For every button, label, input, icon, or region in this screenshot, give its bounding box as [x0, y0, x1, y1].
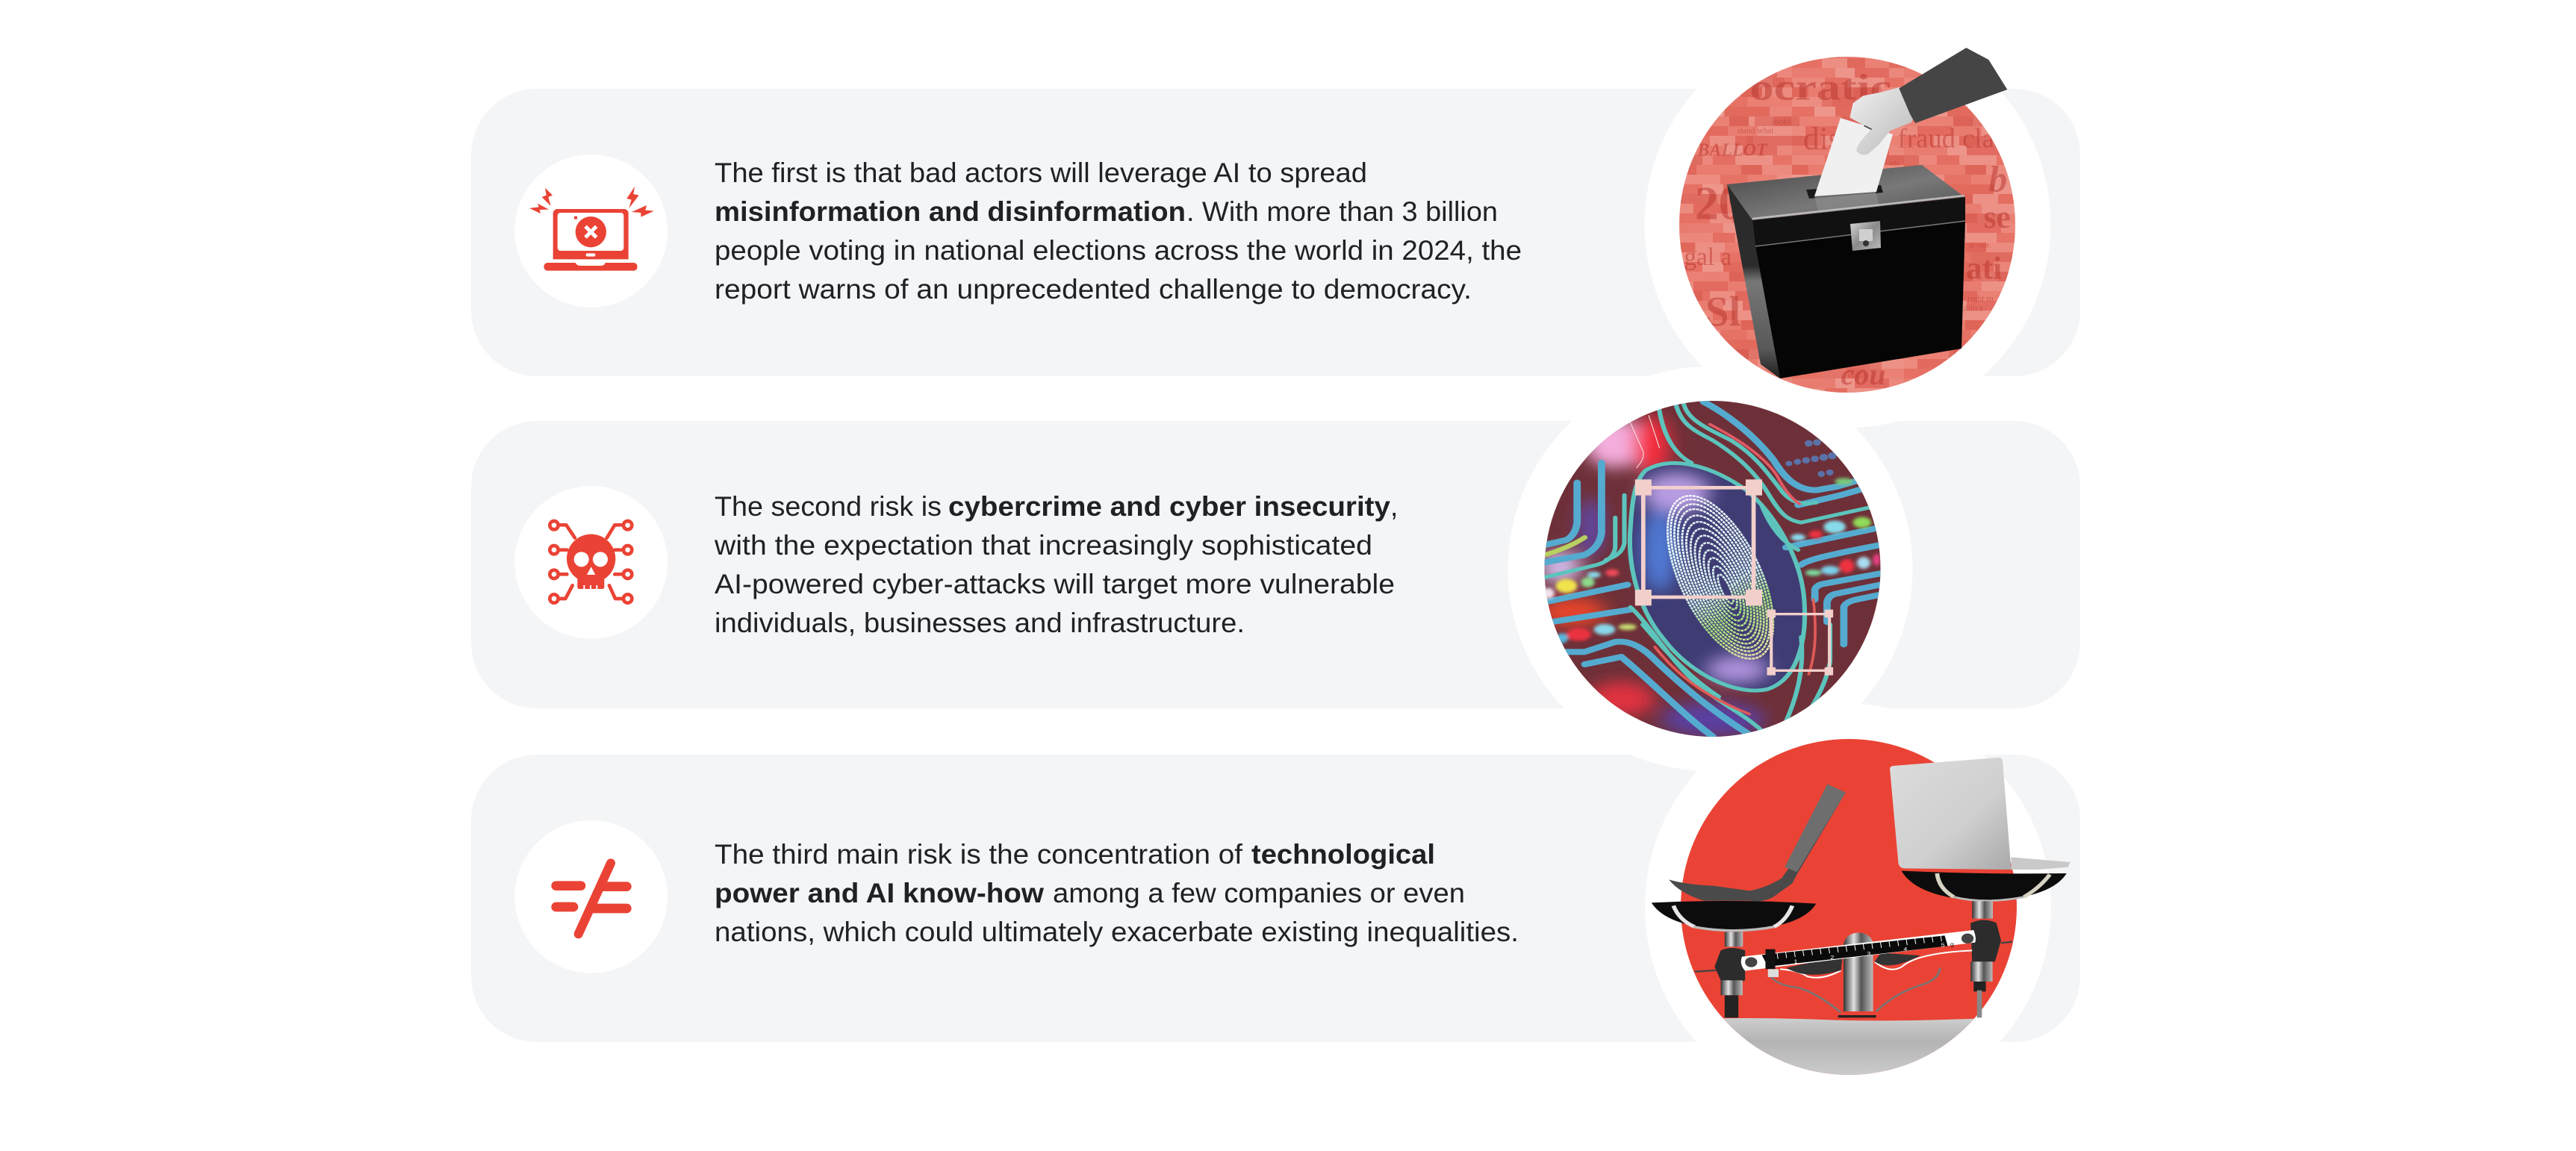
old tool: [1669, 785, 1846, 902]
fingerprint: [1646, 485, 1795, 670]
text: second risk: with the expectation that increasingly sophisticated: [714, 530, 1372, 561]
collage background: 20: [1695, 177, 1742, 229]
circuit traces: [1545, 402, 1880, 737]
text: first risk: misinformation and disinformation: [715, 196, 1186, 227]
central oval: [1630, 463, 1805, 690]
collage background: BALLOT: [1696, 140, 1768, 160]
scale posts: [1695, 901, 2012, 1017]
icon: not equal: [514, 820, 668, 973]
red disc and grey base: [1673, 735, 2023, 1079]
ruler beam: 5: [1941, 942, 1945, 948]
collage background: stand what: [1737, 126, 1774, 135]
text: third risk: technological: [1251, 839, 1435, 870]
text: second risk: cybercrime and cyber insecurity: [948, 491, 1390, 522]
ruler beam: 4: [1903, 946, 1908, 952]
collage background: right m: [1967, 293, 1994, 303]
text: third risk: among a few companies or even: [1053, 878, 1465, 908]
collage background: ar vote.: [1969, 242, 1991, 250]
ballot box: [1727, 165, 1965, 378]
collage background: Sl: [1705, 290, 1740, 336]
ruler beam: 0: [1756, 963, 1761, 969]
text: second risk: individuals, businesses and infrastructure.: [715, 608, 1245, 638]
collage background: b: [1988, 158, 2007, 200]
text: first risk: people voting in national elections across the world in 2024, the: [715, 235, 1522, 266]
glow areas: [1539, 416, 1764, 737]
centre support: [1771, 932, 1972, 1017]
right pan: [1902, 871, 2067, 901]
text: second risk: [714, 491, 1398, 638]
ballot paper: [1814, 118, 1893, 196]
collage background: fraud cla: [1898, 122, 1994, 153]
text: second risk: The second risk is: [715, 491, 942, 522]
ruler beam: 3: [1867, 951, 1871, 957]
collage background: dis: [1803, 121, 1841, 157]
icon: laptop with warning: [514, 155, 668, 308]
text: third risk: The third main risk is the concentration of: [715, 839, 1243, 870]
white rings behind photos: [1508, 22, 2051, 1110]
text: first risk: . With more than 3 billion: [1186, 196, 1498, 227]
text: first risk: The first is that bad actors will leverage AI to spread: [715, 157, 1367, 188]
text: second risk: AI-powered cyber-attacks will target more vulnerable: [715, 569, 1395, 599]
left pan: [1652, 901, 1816, 931]
selection frames: [1643, 487, 1829, 670]
LED components: [1542, 478, 1880, 643]
panel: cybercrime: [471, 421, 2080, 708]
collage background: ublica: [1961, 303, 1984, 314]
text: third risk: [715, 839, 1519, 947]
photo: ballot box on newspaper collage: [1673, 48, 2023, 399]
collage background: cou: [1841, 358, 1886, 391]
text: first risk: [715, 157, 1522, 305]
panel: misinformation: [471, 89, 2080, 376]
collage background: gal a: [1684, 243, 1732, 271]
dots on circuit board: [1785, 439, 1837, 477]
text: third risk: nations, which could ultimately exacerbate existing inequalities.: [715, 917, 1519, 947]
collage background: se: [1984, 199, 2011, 235]
collage background: ocratic: [1749, 66, 1891, 107]
panel: concentration of power: [471, 755, 2080, 1042]
collage background: looki: [1772, 116, 1791, 127]
text: second risk: ,: [1390, 491, 1398, 522]
collage background: uns: [1889, 160, 1900, 168]
ruler beam: g: [1950, 941, 1954, 947]
ruler beam: 1: [1793, 958, 1798, 964]
photo: balance scale with tool and laptop: [1652, 735, 2071, 1079]
collage background: [1673, 52, 2023, 399]
collage background: ati: [1966, 250, 2002, 286]
photo: fingerprint on circuit board: [1539, 398, 1883, 739]
hand and sleeve: [1849, 48, 2007, 155]
text: first risk: report warns of an unprecedented challenge to democracy.: [715, 274, 1472, 305]
ruler beam: 2: [1830, 955, 1835, 961]
icon: skull with circuits: [514, 486, 668, 639]
text: third risk: power and AI know-how: [715, 878, 1044, 908]
laptop: [1890, 758, 2071, 870]
ruler beam: [1741, 930, 1976, 977]
